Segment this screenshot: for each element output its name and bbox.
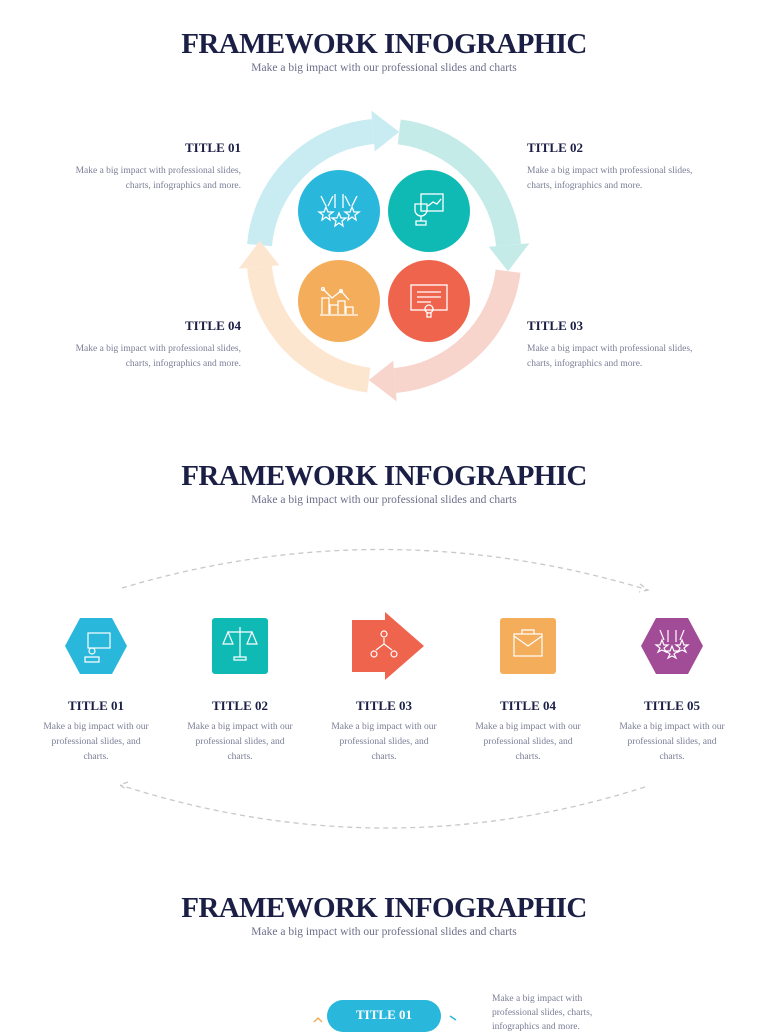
text: title 04: charts, infographics and more.	[126, 359, 241, 369]
item 5 text: TITLE 05	[644, 698, 700, 713]
item 3 text	[331, 698, 437, 762]
text: title 04: Make a big impact with professional slides,	[76, 344, 241, 354]
dashed arc bottom	[120, 782, 645, 828]
text: title 01: Make a big impact with professional slides,	[76, 166, 241, 176]
text: title 03: TITLE 03	[527, 318, 583, 333]
text block section 3	[492, 994, 592, 1032]
item 5 text	[619, 698, 725, 762]
icon circle: chart	[298, 260, 380, 342]
text: title 02: charts, infographics and more.	[527, 181, 642, 191]
text: title 01: charts, infographics and more.	[126, 181, 241, 191]
text: title 04	[76, 318, 241, 369]
subtitle 3: Make a big impact with our professional slides and charts	[251, 926, 517, 938]
arrow: teal	[399, 132, 529, 271]
item 4 text: TITLE 04	[500, 698, 556, 713]
item 1 text: TITLE 01	[68, 698, 124, 713]
item 1 text: professional slides, and	[52, 737, 140, 747]
item 5 text: Make a big impact with our	[619, 722, 725, 732]
item 5 text: charts.	[659, 752, 685, 762]
item 1 text: Make a big impact with our	[43, 722, 149, 732]
arrow: orange	[239, 241, 369, 380]
item 2 text: charts.	[227, 752, 253, 762]
text: title 02	[527, 140, 692, 191]
item 2 text	[187, 698, 293, 762]
text: title 01: TITLE 01	[185, 140, 241, 155]
item 2 text: TITLE 02	[212, 698, 268, 713]
text: title 03: charts, infographics and more.	[527, 359, 642, 369]
dashed arc top	[122, 549, 648, 592]
icon circle: medals	[298, 170, 380, 252]
process row	[65, 548, 703, 829]
icon circle: certificate	[388, 260, 470, 342]
item 4 text: Make a big impact with our	[475, 722, 581, 732]
title 3: FRAMEWORK INFOGRAPHIC	[181, 892, 587, 924]
icon: hexagon blue	[65, 618, 127, 674]
item 4 text: charts.	[515, 752, 541, 762]
icon circle: trophy	[388, 170, 470, 252]
title 2: FRAMEWORK INFOGRAPHIC	[181, 460, 587, 492]
text: title 03: Make a big impact with professional slides,	[527, 344, 692, 354]
icon: square orange	[500, 618, 556, 674]
item 3 text: charts.	[371, 752, 397, 762]
title 1: FRAMEWORK INFOGRAPHIC	[181, 28, 587, 60]
item 2 text: professional slides, and	[196, 737, 284, 747]
text: title 03	[527, 318, 692, 369]
text block section 3: Make a big impact with	[492, 994, 582, 1004]
icon: arrow red	[352, 612, 424, 680]
item 4 text	[475, 698, 581, 762]
text block section 3: infographics and more.	[492, 1022, 580, 1032]
item 1 text	[43, 698, 149, 762]
item 3 text: TITLE 03	[356, 698, 412, 713]
text block section 3: professional slides, charts,	[492, 1008, 592, 1018]
icon: hexagon purple	[641, 618, 703, 674]
small arrows	[314, 1015, 456, 1022]
text: title 02: Make a big impact with professional slides,	[527, 166, 692, 176]
text: title 04: TITLE 04	[185, 318, 241, 333]
arrow: blue	[260, 111, 399, 245]
item 5 text: professional slides, and	[628, 737, 716, 747]
arrow: pink	[369, 271, 508, 401]
icon: square teal	[212, 618, 268, 674]
pill: title 01: TITLE 01	[356, 1007, 412, 1022]
item 2 text: Make a big impact with our	[187, 722, 293, 732]
item 1 text: charts.	[83, 752, 109, 762]
item 3 text: professional slides, and	[340, 737, 428, 747]
subtitle 1: Make a big impact with our professional slides and charts	[251, 62, 517, 74]
cycle diagram	[238, 110, 530, 402]
item 3 text: Make a big impact with our	[331, 722, 437, 732]
subtitle 2: Make a big impact with our professional slides and charts	[251, 494, 517, 506]
pill: title 01	[327, 1000, 441, 1032]
item 4 text: professional slides, and	[484, 737, 572, 747]
text: title 02: TITLE 02	[527, 140, 583, 155]
text: title 01	[76, 140, 241, 191]
